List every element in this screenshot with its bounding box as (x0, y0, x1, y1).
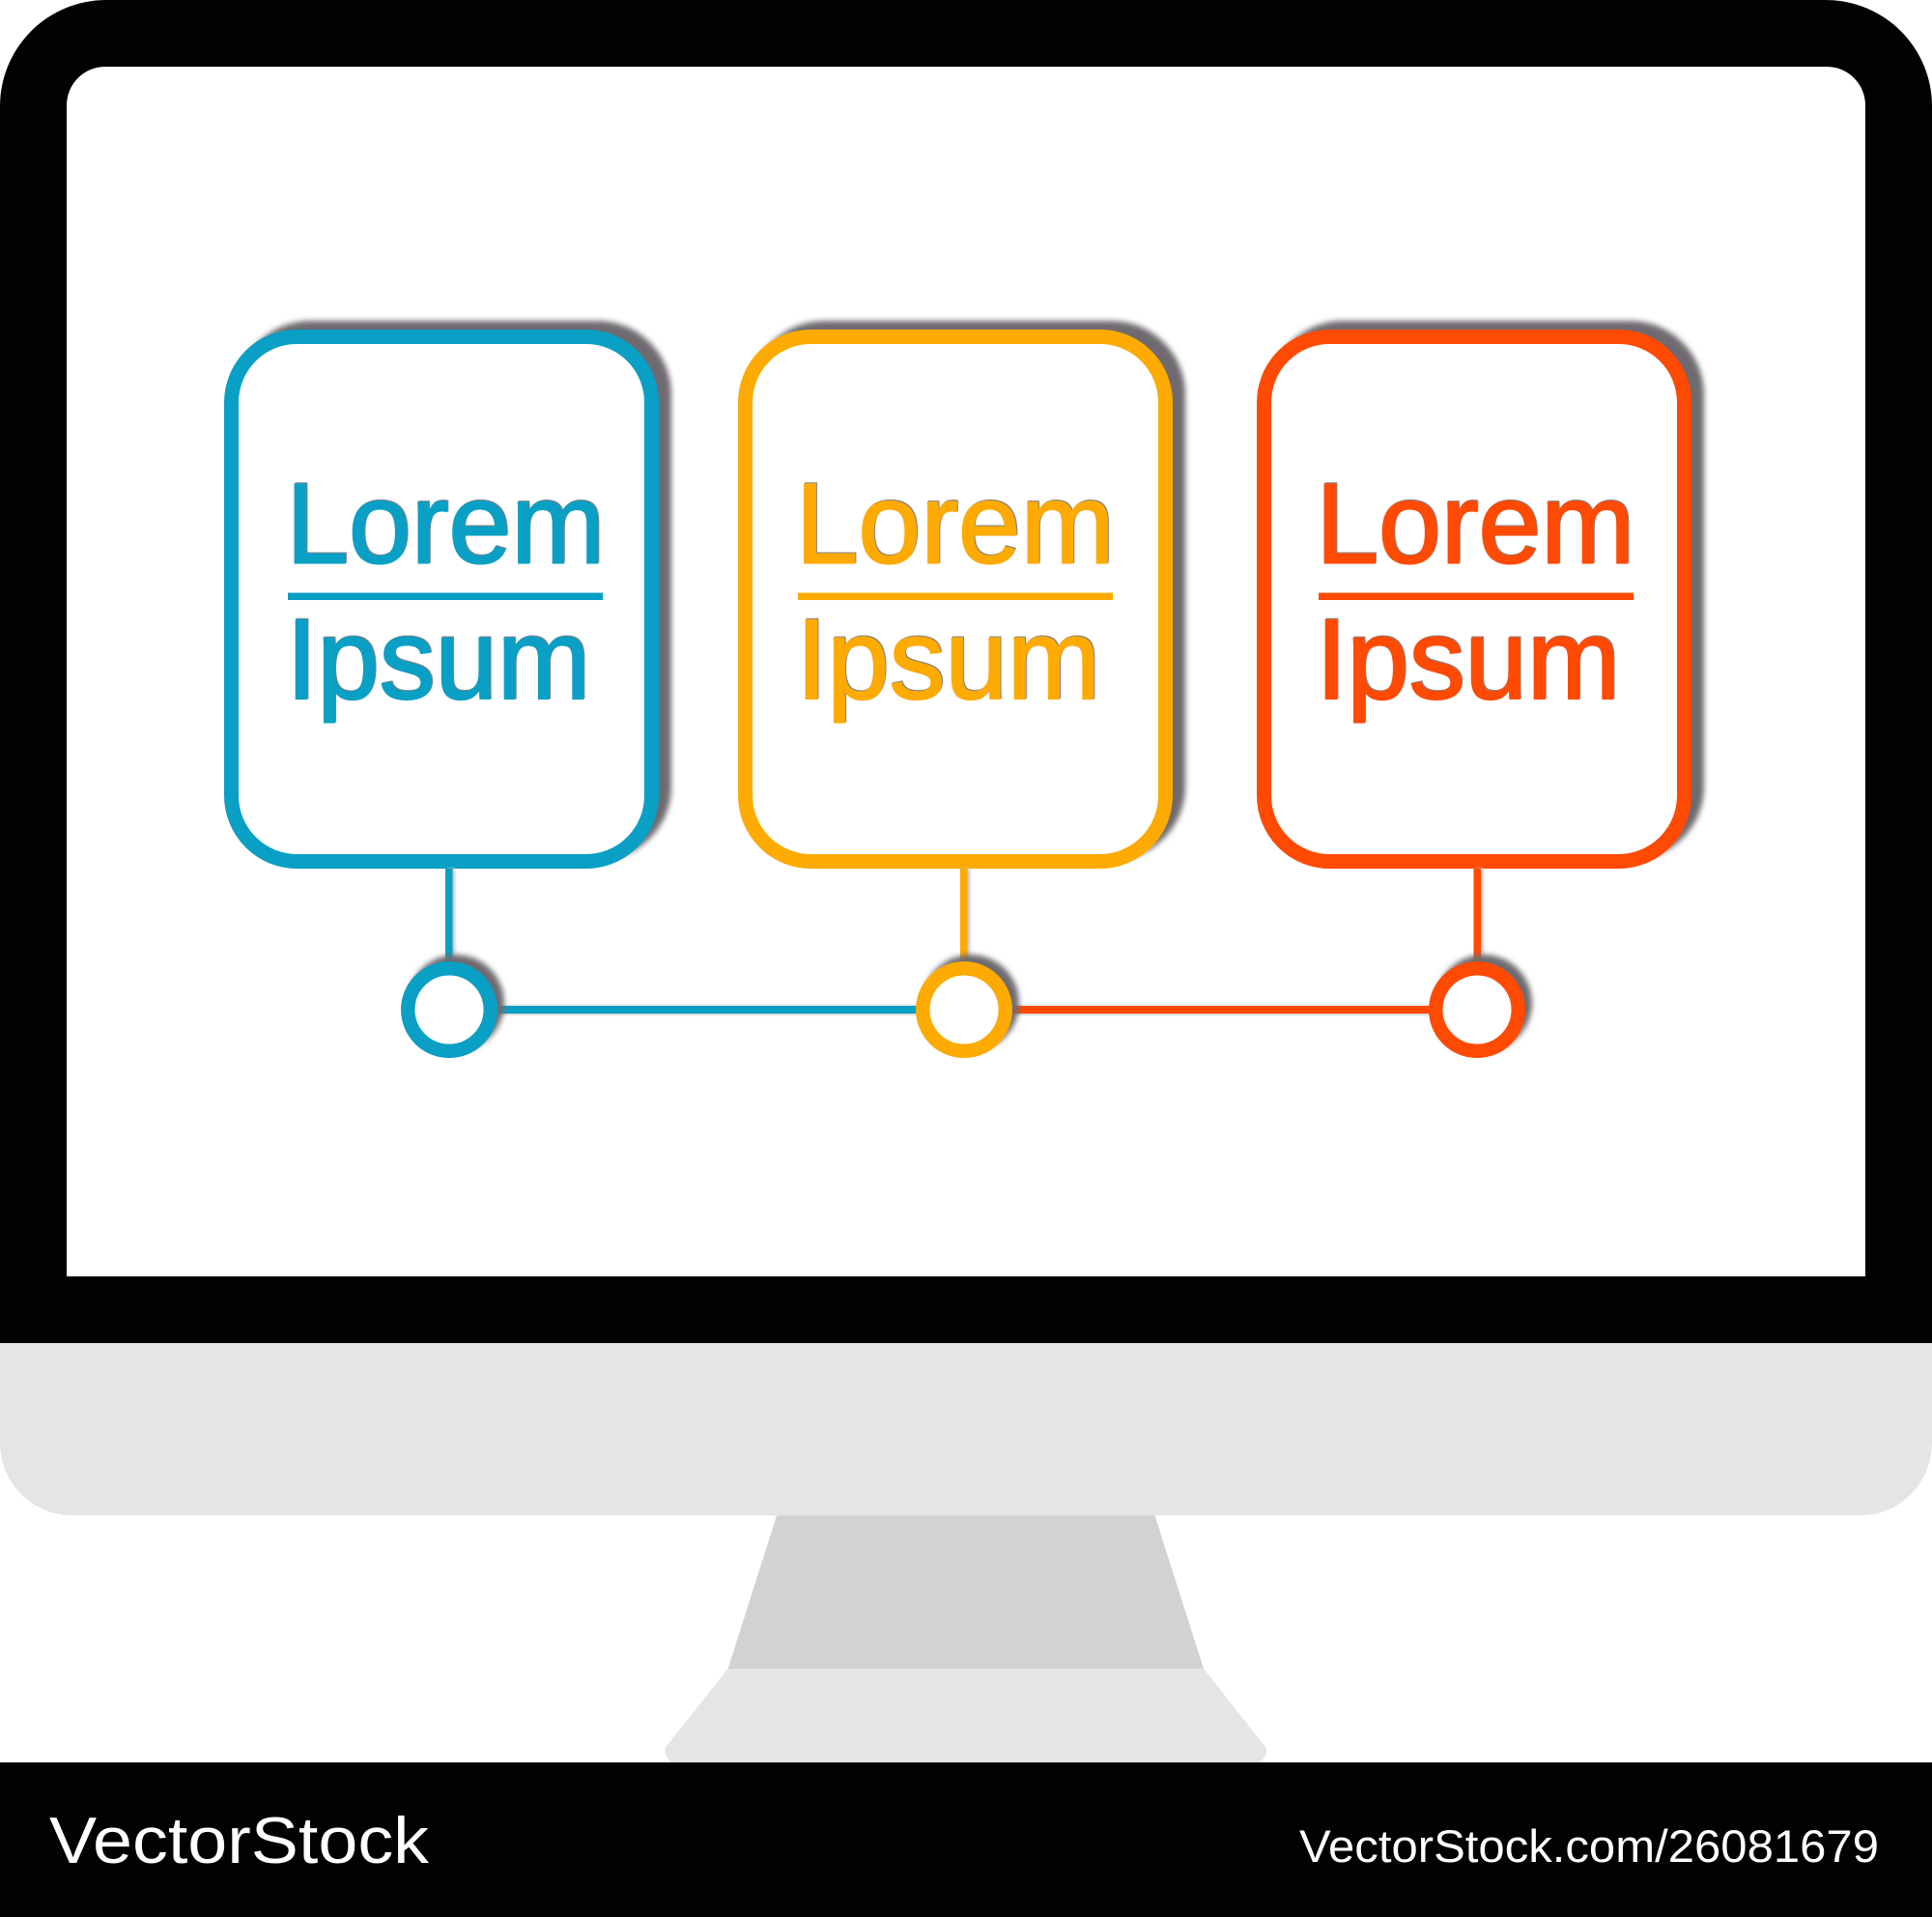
label: Lorem: Lorem (796, 460, 1115, 587)
timeline (408, 869, 1532, 1051)
footer bar (0, 1762, 1932, 1917)
stand foot (665, 1669, 1266, 1762)
label: Ipsum: Ipsum (1316, 596, 1620, 724)
card shadow (237, 321, 671, 860)
node: red (1435, 955, 1532, 1051)
node: blue (408, 955, 504, 1051)
brand name: VectorStock (49, 1804, 430, 1877)
divider (798, 593, 1113, 600)
panel: blue card (232, 321, 671, 862)
divider (1319, 593, 1634, 600)
divider (288, 593, 603, 600)
stand neck (728, 1515, 1204, 1669)
orange stem (960, 869, 970, 964)
label: Ipsum: Ipsum (286, 596, 590, 724)
blue connector (493, 1006, 920, 1015)
panel: orange card (746, 321, 1185, 862)
red connector (1009, 1006, 1432, 1015)
card outline (1264, 336, 1685, 862)
panel: red card (1264, 321, 1704, 862)
label: Lorem: Lorem (286, 460, 605, 587)
blue stem (445, 869, 455, 964)
card shadow (751, 321, 1185, 860)
card outline (232, 336, 651, 862)
screen (67, 67, 1865, 1276)
node: orange (923, 955, 1019, 1051)
card outline (746, 336, 1165, 862)
card shadow (1269, 321, 1704, 860)
image url: VectorStock.com/26081679 (1299, 1821, 1879, 1873)
label: Lorem: Lorem (1316, 460, 1634, 587)
monitor bezel (0, 0, 1932, 1343)
label: Ipsum: Ipsum (796, 596, 1100, 724)
red stem (1474, 869, 1484, 964)
monitor chin (0, 1343, 1932, 1516)
